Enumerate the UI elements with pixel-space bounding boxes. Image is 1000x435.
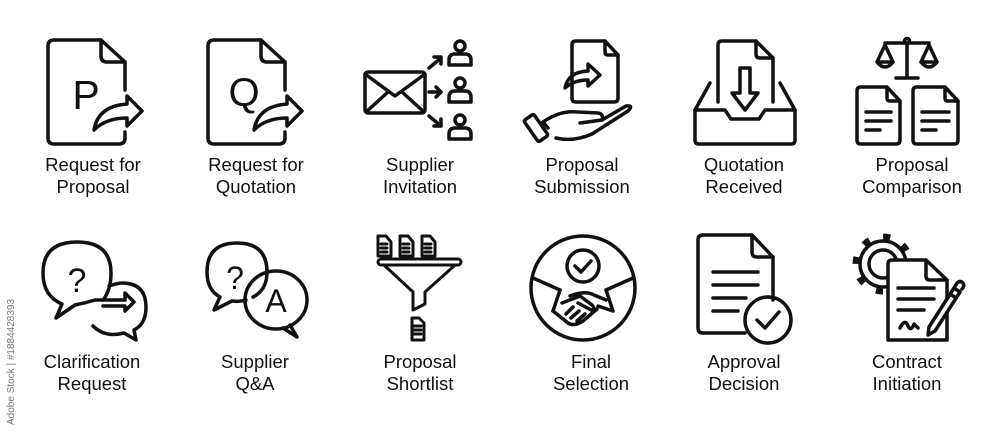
icon: quotation received (695, 41, 795, 144)
labels: Request for (45, 154, 141, 175)
labels: Initiation (873, 373, 941, 394)
watermark text: Adobe Stock | #1884428393 (6, 299, 17, 425)
icon: supplier invitation (365, 41, 471, 139)
icon: approval decision (698, 235, 791, 343)
labels: Request for (208, 154, 304, 175)
labels: Received (705, 176, 783, 197)
icon: request for quotation: Q (228, 71, 260, 115)
labels: Request (58, 373, 126, 394)
labels: Approval (707, 351, 781, 372)
labels: Supplier (386, 154, 454, 175)
labels: Selection (553, 373, 629, 394)
labels: Contract (872, 351, 942, 372)
icon: proposal shortlist (378, 236, 461, 340)
labels: Clarification (44, 351, 140, 372)
labels: Proposal (383, 351, 457, 372)
icon: request for proposal: P (72, 72, 100, 118)
icon: supplier q&a (207, 243, 307, 337)
icon: proposal comparison (857, 38, 958, 144)
labels: Supplier (221, 351, 289, 372)
labels: Proposal (56, 176, 130, 197)
icon: contract initiation (856, 237, 964, 340)
labels: Invitation (383, 176, 457, 197)
labels: Shortlist (387, 373, 453, 394)
icon: clarification request (43, 242, 146, 340)
icon: supplier q&a: A (265, 283, 287, 319)
labels: Q&A (235, 373, 275, 394)
labels: Quotation (216, 176, 296, 197)
icon: final selection (531, 236, 635, 340)
icon: request for proposal (48, 40, 142, 144)
icon: request for quotation (208, 40, 302, 144)
labels: Comparison (862, 176, 962, 197)
labels: Final (571, 351, 611, 372)
labels: Quotation (704, 154, 784, 175)
labels (44, 154, 962, 394)
labels: Decision (709, 373, 779, 394)
icon: clarification request: ? (68, 262, 86, 300)
icon: proposal submission (524, 41, 631, 142)
labels: Proposal (875, 154, 949, 175)
labels: Proposal (545, 154, 619, 175)
icon: supplier q&a: ? (226, 260, 244, 296)
labels: Submission (534, 176, 630, 197)
